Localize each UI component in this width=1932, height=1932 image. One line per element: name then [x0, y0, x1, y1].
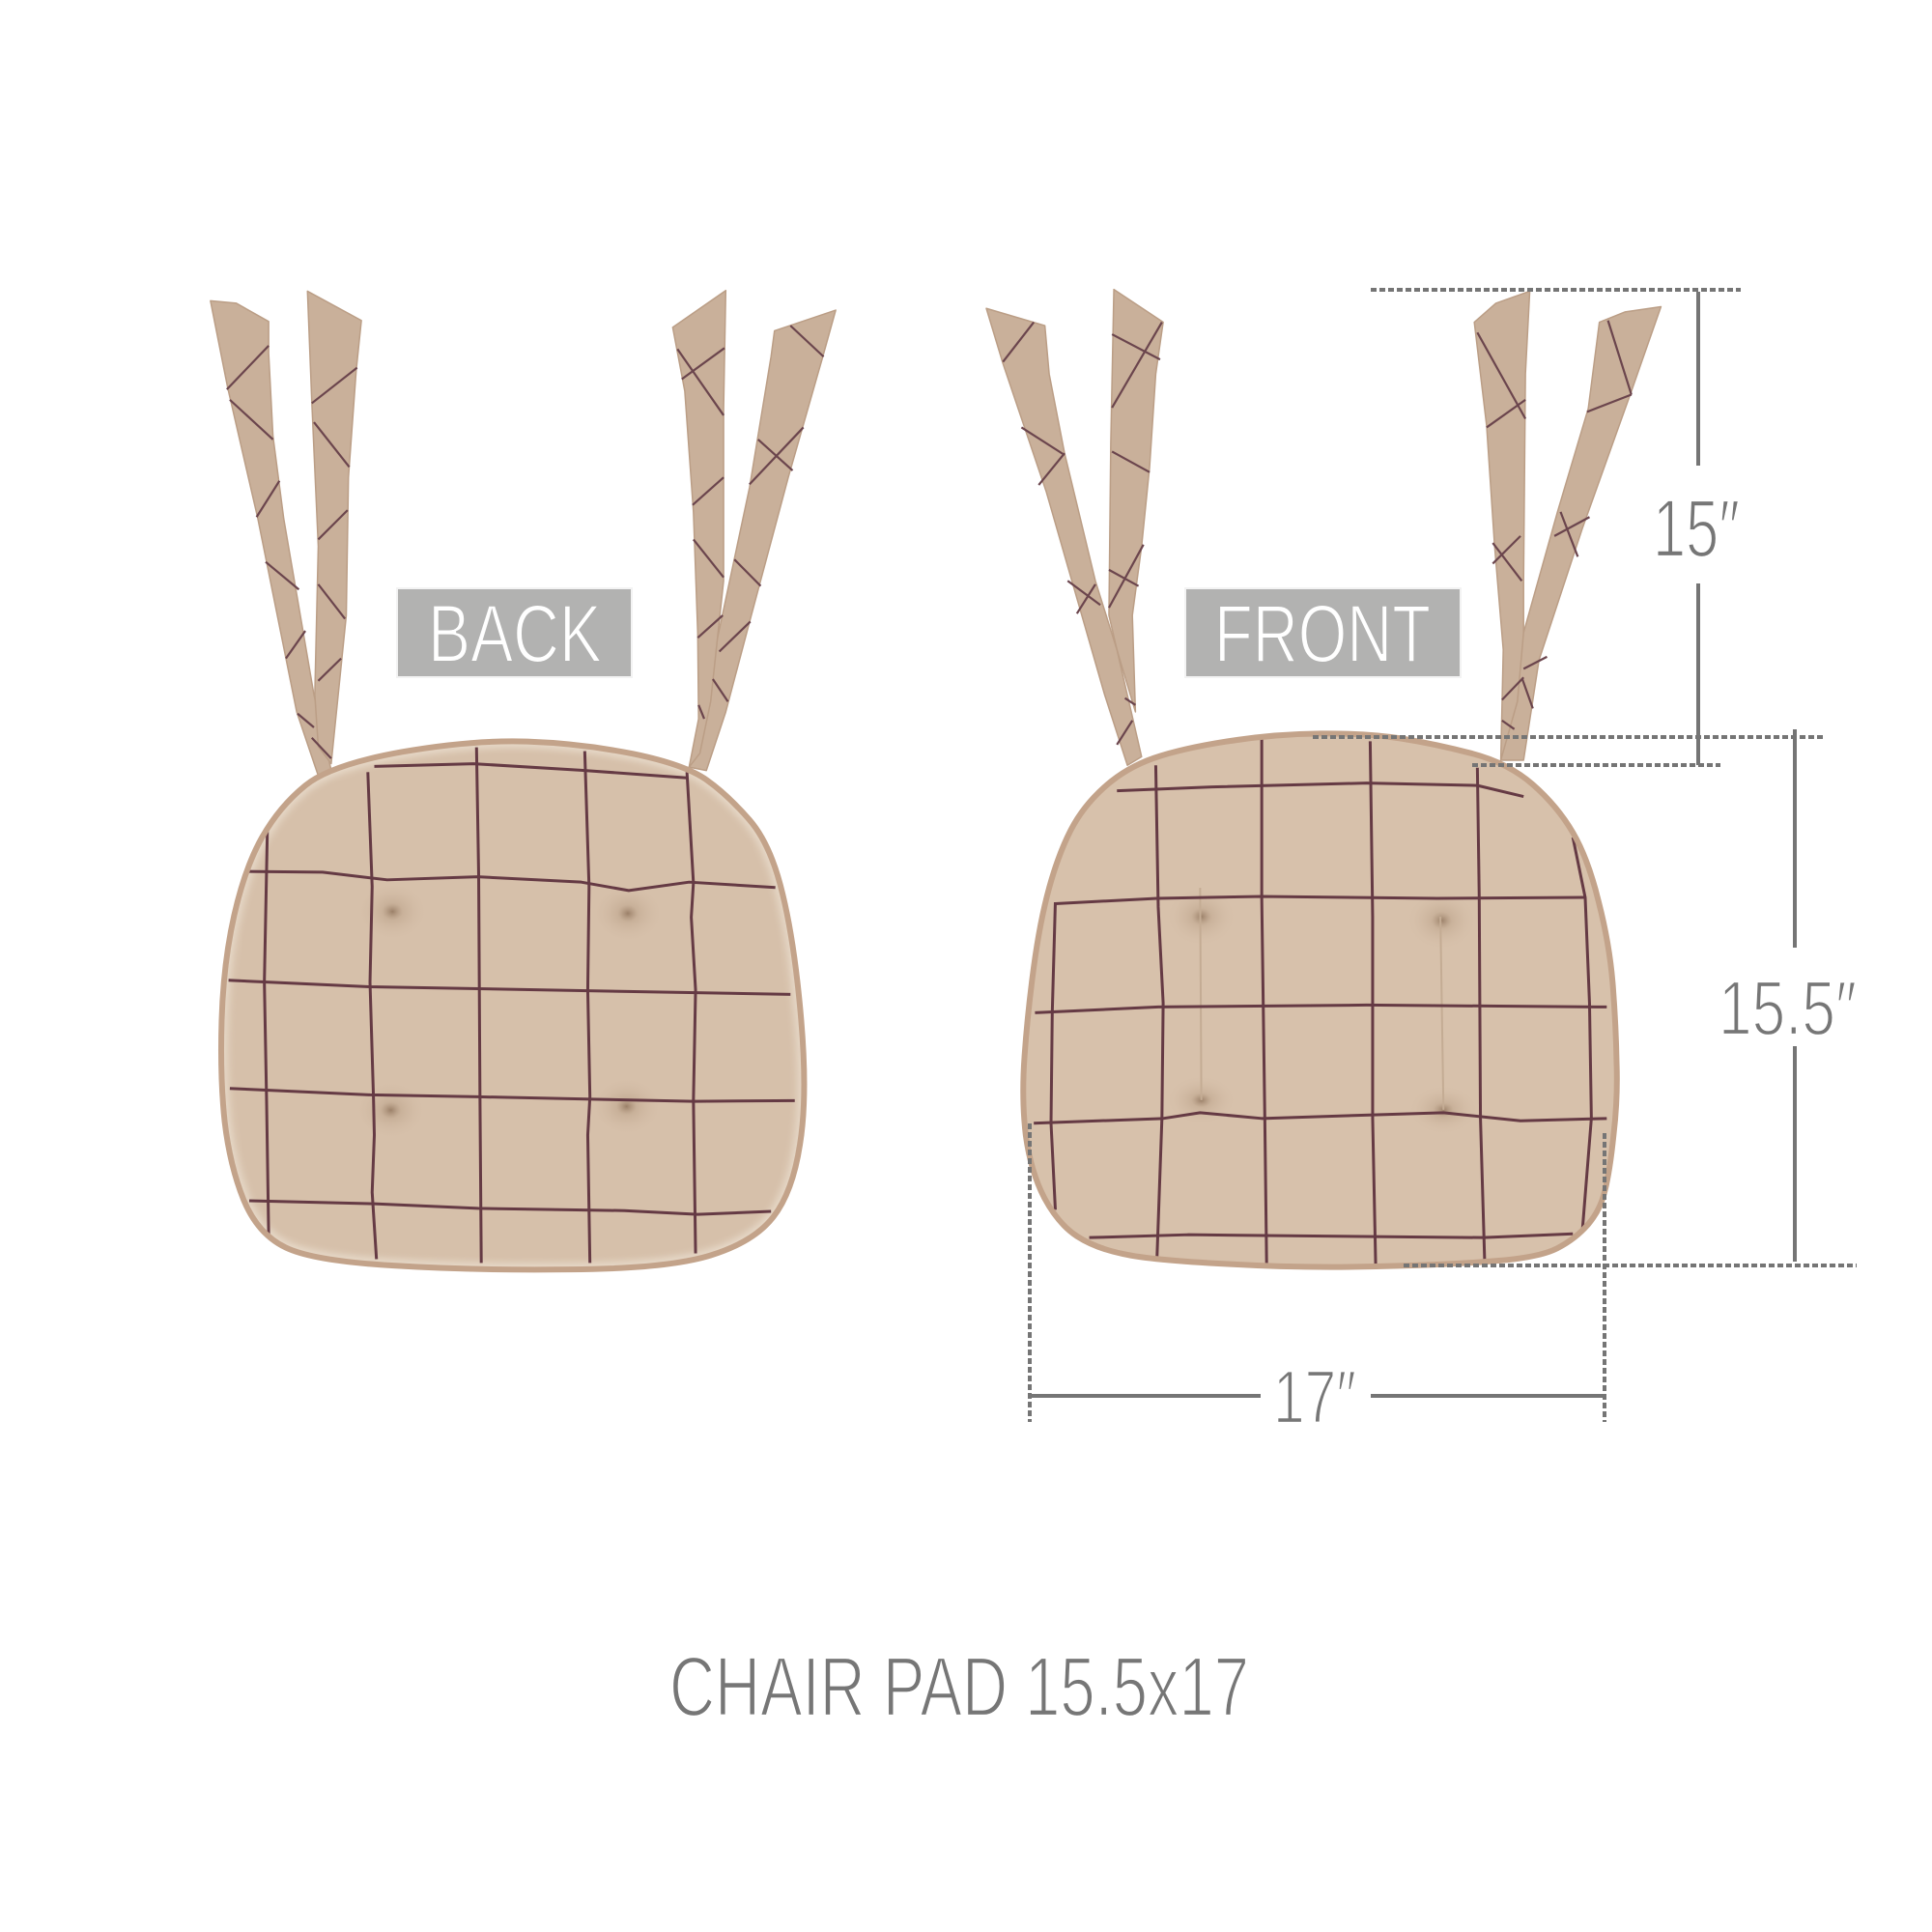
dimension: pad width 17 inches: 17″ [1273, 1354, 1356, 1439]
front pad ties, left pair [986, 290, 1163, 765]
dimension: tie length 15 inches: 15″ [1653, 483, 1740, 574]
back pad ties, left pair [211, 291, 361, 776]
front pad ties, right pair [1474, 291, 1661, 760]
front cushion [1023, 733, 1617, 1267]
back cushion [221, 741, 804, 1269]
back pad ties, right pair [672, 291, 836, 771]
caption: CHAIR PAD 15.5x17 [669, 1640, 1249, 1734]
label: FRONT: FRONT [1214, 588, 1431, 679]
panel: back chair pad [211, 291, 836, 1269]
label: BACK: BACK [428, 588, 602, 679]
panel: front chair pad [986, 290, 1661, 1267]
dimension: pad height 15.5 inches: 15.5″ [1719, 965, 1857, 1051]
